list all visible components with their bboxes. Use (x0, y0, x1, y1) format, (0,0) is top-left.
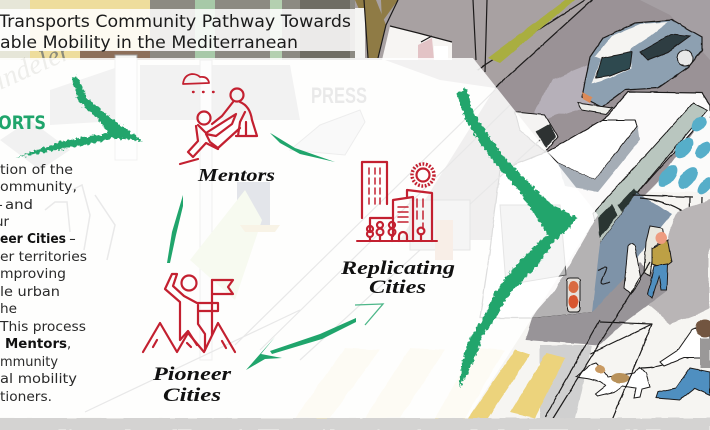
pole lines near crosswalk (545, 262, 652, 425)
text block: description: ommunity, (0, 180, 77, 195)
crosswalk stripes (295, 348, 565, 418)
mauve ground behind tree (355, 0, 592, 88)
icon: pioneer cities, figure with flag on mountains (143, 274, 235, 352)
faded storefront sketches: PRESS (311, 83, 367, 108)
arrow: mentors to pioneer cities (167, 195, 183, 263)
title banner: Transports Community Pathway Towards (0, 12, 351, 32)
label: pioneer cities (152, 364, 232, 406)
tree and posts (355, 0, 487, 72)
pavement and road shadow (525, 262, 668, 345)
faded storefront sketches (0, 36, 566, 412)
people at the bus stop (624, 226, 672, 298)
small van ahead of bus (515, 112, 558, 152)
label: replicating cities: Replicating (340, 258, 455, 279)
text block: description: - (69, 232, 76, 247)
top buildings strip (0, 0, 355, 60)
text block: description: This process (0, 320, 86, 335)
text block: description: mproving (0, 267, 66, 282)
panel: translucent arrow overlay (0, 58, 598, 418)
text block: description: mmunity (0, 355, 58, 370)
text block: description: tion of the (0, 163, 73, 178)
title banner: able Mobility in the Mediterranean (0, 33, 298, 53)
text block: description: al mobility (0, 372, 77, 387)
road edge lines (477, 0, 592, 88)
sidewalk wash right of the bus (640, 200, 710, 325)
text block: description: er territories (0, 250, 87, 265)
text block: description: , (67, 337, 71, 352)
person walking dog (656, 319, 710, 400)
icon: mentors, two people climbing (180, 74, 257, 164)
label: replicating cities: Cities (369, 277, 426, 298)
icon: replicating cities skyline (357, 162, 437, 241)
arrow: top-left brush stroke (15, 76, 143, 158)
label: pioneer cities: Cities (163, 385, 221, 406)
text block: description: eer Cities (0, 232, 66, 247)
text block: description: tioners. (0, 390, 52, 405)
title banner (0, 9, 355, 53)
label: mentors: Mentors (197, 165, 275, 185)
bottom paper band (0, 418, 710, 430)
arrow: pioneer and replicating double-headed (246, 304, 383, 370)
dog (576, 360, 675, 398)
parked car (578, 20, 702, 114)
arrow: large chevron brush stroke (457, 88, 577, 388)
grass strip (488, 0, 575, 63)
arrow: mentors to replicating cities (270, 133, 335, 162)
bus (480, 92, 710, 318)
label: replicating cities (340, 258, 455, 298)
text block: description (0, 163, 87, 405)
text block: description: he (0, 302, 17, 317)
label: pioneer cities: Pioneer (152, 364, 232, 385)
text block: description: le urban (0, 285, 60, 300)
text block: description: Mentors (5, 337, 67, 352)
road (400, 0, 710, 240)
text block: description: and (5, 198, 33, 213)
